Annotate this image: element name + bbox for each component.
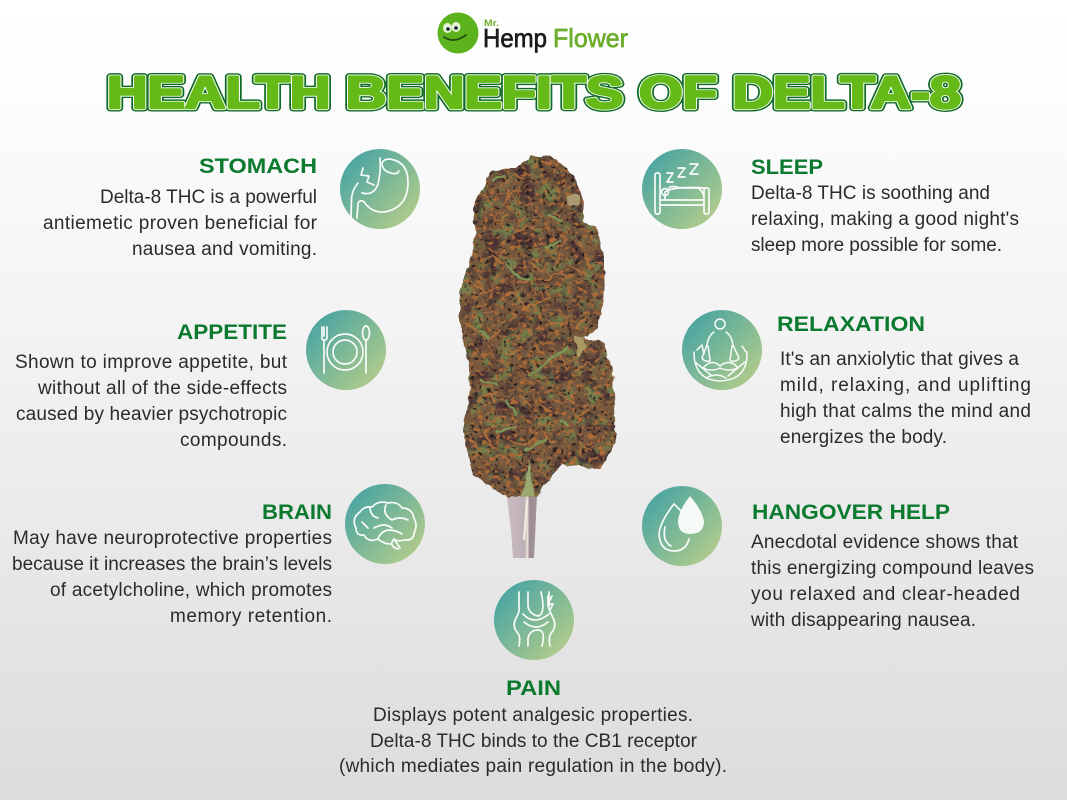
text: stomach description: nausea and vomiting. xyxy=(132,239,317,260)
text: appetite description: compounds. xyxy=(180,430,287,451)
text: stomach description: Delta-8 THC is a powerful xyxy=(100,187,317,208)
heading: brain: BRAIN xyxy=(262,501,332,524)
text: stomach description xyxy=(43,187,318,260)
heading: sleep: SLEEP xyxy=(751,156,823,179)
icon: brain xyxy=(345,484,425,564)
title: HEALTH BENEFITS OF DELTA-8 xyxy=(107,67,961,118)
text: relaxation description: high that calms the mind and xyxy=(780,401,1031,422)
panel: hangover help xyxy=(642,486,1034,631)
metal stem xyxy=(507,495,537,558)
text: brain description: memory retention. xyxy=(170,606,332,627)
icon: water drops xyxy=(642,486,722,566)
title: HEALTH BENEFITS OF DELTA-8 xyxy=(107,67,961,118)
text: hangover description: you relaxed and clear-headed xyxy=(751,584,1020,605)
text: sleep description xyxy=(751,183,1019,256)
text: appetite description xyxy=(15,352,288,451)
text: hangover description: this energizing compound leaves xyxy=(751,558,1034,579)
logo wordmark: Hemp xyxy=(483,23,547,53)
panel: sleep xyxy=(642,149,1019,256)
icon: meditating figure xyxy=(682,310,762,390)
text: brain description: May have neuroprotective properties xyxy=(13,528,332,549)
panel: brain xyxy=(12,484,425,627)
logo wordmark: Mr. xyxy=(484,18,499,28)
logo: Mr. Hemp Flower xyxy=(438,12,628,54)
panel: stomach xyxy=(43,149,420,260)
text: brain description: of acetylcholine, which promotes xyxy=(50,580,332,601)
logo wordmark xyxy=(483,18,628,53)
text: hangover description xyxy=(750,532,1034,631)
text: appetite description: Shown to improve appetite, but xyxy=(15,352,288,373)
text: relaxation description: It's an anxiolytic that gives a xyxy=(780,349,1019,370)
text: relaxation description: energizes the body. xyxy=(780,427,947,448)
bud body xyxy=(458,155,617,498)
hemp flower bud photo xyxy=(458,155,617,558)
heading: hangover help: HANGOVER HELP xyxy=(752,501,950,524)
icon: bed with zzz xyxy=(642,149,722,229)
panel: appetite xyxy=(15,310,386,451)
text: relaxation description xyxy=(780,349,1031,448)
icon: stomach xyxy=(340,149,420,229)
heading: appetite: APPETITE xyxy=(177,321,287,344)
icon: knee joint xyxy=(494,580,574,660)
text: relaxation description: mild, relaxing, and uplifting xyxy=(780,375,1031,396)
text: sleep description: sleep more possible for some. xyxy=(751,235,1002,256)
text: pain description: Delta-8 THC binds to the CB1 receptor xyxy=(370,731,698,752)
icon: smiling green face xyxy=(438,12,478,54)
heading: relaxation: RELAXATION xyxy=(777,313,925,336)
heading: pain: PAIN xyxy=(506,677,561,700)
icon: plate and cutlery xyxy=(306,310,386,390)
text: hangover description: with disappearing nausea. xyxy=(750,610,976,631)
text: hangover description: Anecdotal evidence shows that xyxy=(751,532,1019,553)
text: sleep description: Delta-8 THC is soothing and xyxy=(751,183,990,204)
text: pain description: Displays potent analgesic properties. xyxy=(373,705,693,726)
text: pain description xyxy=(339,705,727,777)
text: appetite description: caused by heavier psychotropic xyxy=(16,404,287,425)
panel: relaxation xyxy=(682,310,1031,448)
text: appetite description: without all of the side-effects xyxy=(37,378,287,399)
text: pain description: (which mediates pain regulation in the body). xyxy=(339,756,727,777)
title: HEALTH BENEFITS OF DELTA-8 xyxy=(107,67,961,118)
heading: stomach: STOMACH xyxy=(199,155,317,178)
text: stomach description: antiemetic proven beneficial for xyxy=(43,213,318,234)
panel: pain xyxy=(339,580,727,777)
text: sleep description: relaxing, making a good night's xyxy=(751,209,1019,230)
text: brain description xyxy=(12,528,332,627)
text: brain description: because it increases the brain’s levels xyxy=(12,554,332,575)
logo wordmark: Flower xyxy=(553,23,628,53)
